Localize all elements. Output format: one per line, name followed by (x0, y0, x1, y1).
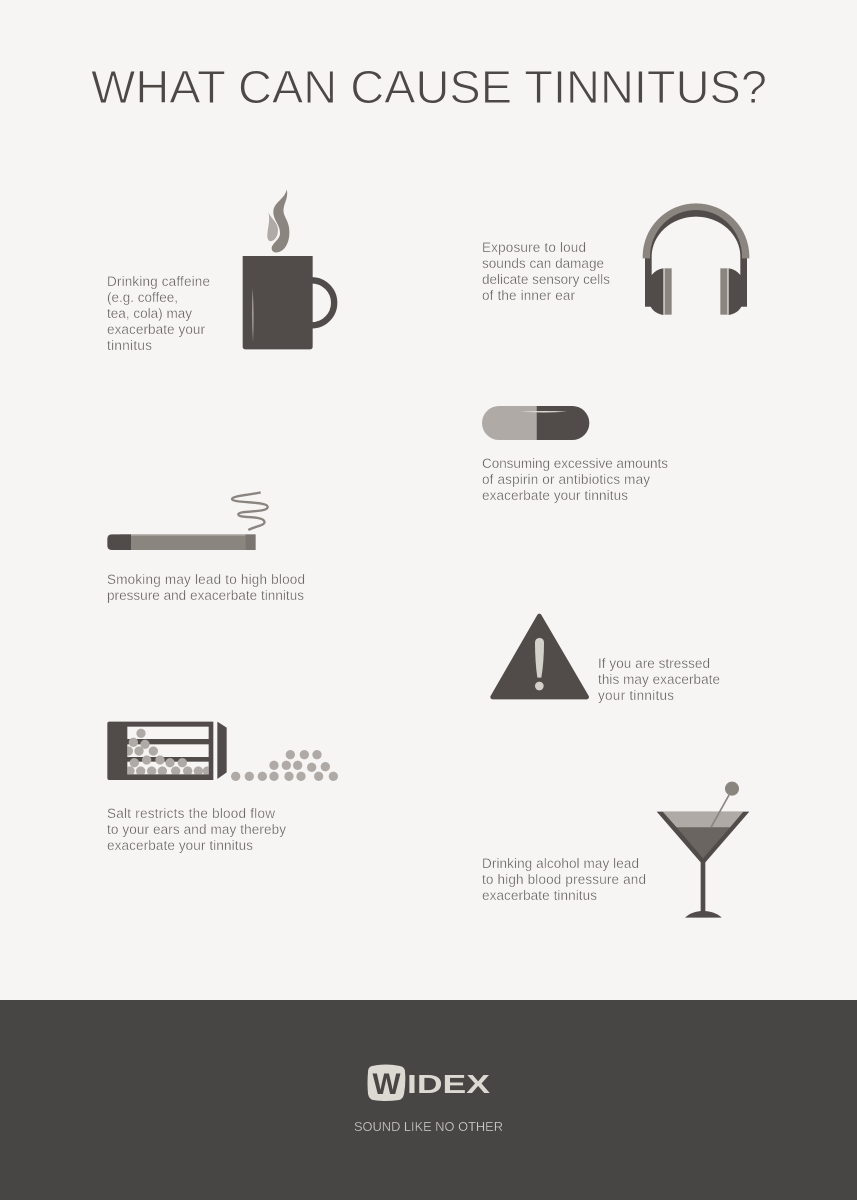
panel: stress (493, 616, 720, 703)
panel: smoking (107, 492, 305, 603)
icon: coffee mug (243, 189, 334, 349)
panel: loud sounds (482, 203, 749, 315)
text: caffeine: Drinking caffeine (107, 274, 210, 289)
text: salt: to your ears and may thereby (107, 822, 286, 837)
icon: salt box (107, 722, 338, 781)
icon: warning triangle (493, 616, 587, 697)
text: loud sounds: of the inner ear (482, 288, 576, 303)
panel: alcohol (482, 782, 749, 918)
title: WHAT CAN CAUSE TINNITUS? (91, 61, 767, 113)
text: loud sounds: sounds can damage (482, 256, 604, 271)
panel: aspirin (482, 406, 668, 503)
icon: cigarette (107, 492, 268, 550)
text: caffeine: tinnitus (107, 338, 152, 353)
tagline: SOUND LIKE NO OTHER (354, 1119, 503, 1134)
icon: headphones (643, 203, 749, 315)
logo: Widex (368, 1064, 491, 1101)
logo badge with W: W (372, 1068, 401, 1101)
footer band (0, 1000, 857, 1200)
text: alcohol: Drinking alcohol may lead (482, 856, 639, 871)
text: alcohol: to high blood pressure and (482, 872, 646, 887)
text: stress: this may exacerbate (598, 672, 720, 687)
text: salt: exacerbate your tinnitus (107, 838, 253, 853)
text: aspirin: of aspirin or antibiotics may (482, 472, 650, 487)
text: salt: Salt restricts the blood flow (107, 806, 275, 821)
wordmark: IDEX (407, 1069, 491, 1099)
text: aspirin: exacerbate your tinnitus (482, 488, 628, 503)
text: loud sounds: Exposure to loud (482, 240, 586, 255)
panel: caffeine (107, 189, 334, 353)
text: smoking: Smoking may lead to high blood (107, 572, 305, 587)
text: caffeine: (e.g. coffee, (107, 290, 178, 305)
panel: salt (107, 722, 338, 853)
text: stress: your tinnitus (598, 688, 674, 703)
text: smoking: pressure and exacerbate tinnitus (107, 588, 304, 603)
text: alcohol: exacerbate tinnitus (482, 888, 597, 903)
icon: martini glass (657, 782, 749, 918)
text: aspirin: Consuming excessive amounts (482, 456, 668, 471)
text: loud sounds: delicate sensory cells (482, 272, 610, 287)
icon: pill (482, 406, 589, 440)
text: caffeine: tea, cola) may (107, 306, 192, 321)
text: stress: If you are stressed (598, 656, 710, 671)
text: caffeine: exacerbate your (107, 322, 206, 337)
